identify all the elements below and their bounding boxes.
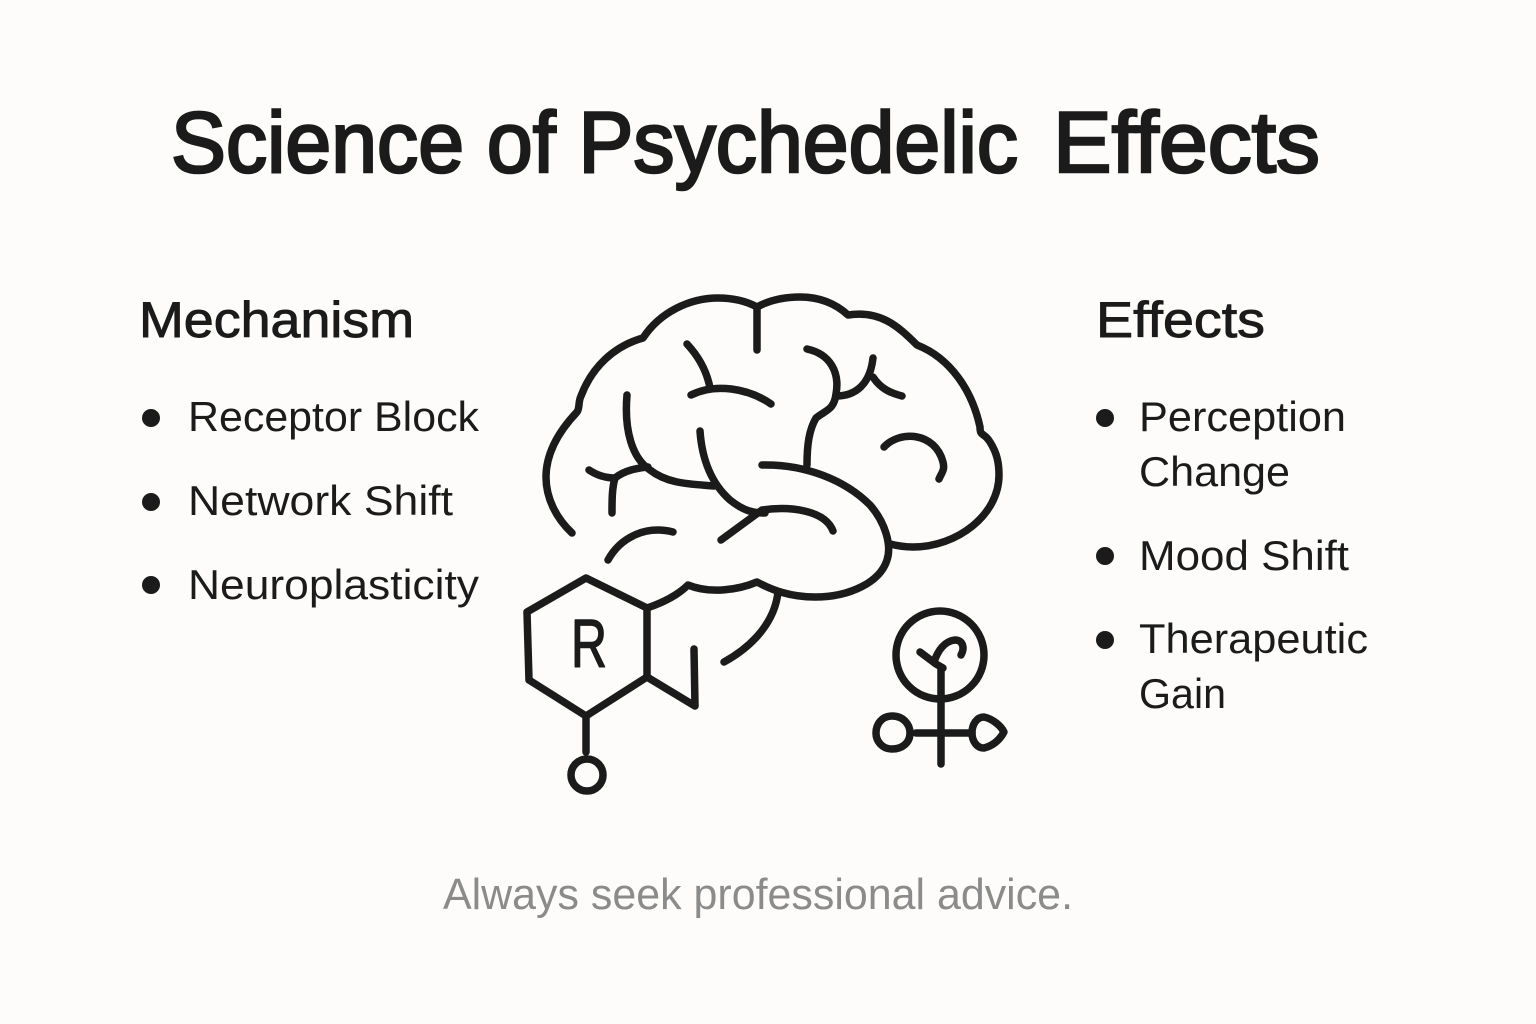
- heading: effects: Effects: [1096, 292, 1265, 348]
- list item: perception change: Change: [1139, 448, 1290, 495]
- title: Science of Psychedelic: [171, 95, 1018, 191]
- panel: mechanism: [139, 292, 480, 608]
- list item: neuroplasticity: Neuroplasticity: [188, 561, 479, 608]
- heading: mechanism: Mechanism: [139, 292, 414, 348]
- list item: therapeutic gain: Gain: [1139, 670, 1226, 717]
- footer note: Always seek professional advice.: [443, 870, 1073, 919]
- list item: receptor block: Receptor Block: [188, 393, 480, 440]
- list item: perception change: [1096, 393, 1346, 495]
- list item: perception change: Perception: [1139, 393, 1346, 440]
- list item: network shift: Network Shift: [188, 477, 453, 524]
- icon: brain: [546, 297, 999, 662]
- icon: symbol: [876, 611, 1004, 764]
- list item: mood shift: Mood Shift: [1139, 532, 1349, 579]
- title: Effects: [1053, 95, 1320, 191]
- molecule label: R: [571, 606, 607, 682]
- panel: effects: [1096, 292, 1368, 717]
- icon: molecule: [527, 578, 695, 791]
- list item: therapeutic gain: Therapeutic: [1139, 615, 1368, 662]
- list item: therapeutic gain: [1096, 615, 1368, 717]
